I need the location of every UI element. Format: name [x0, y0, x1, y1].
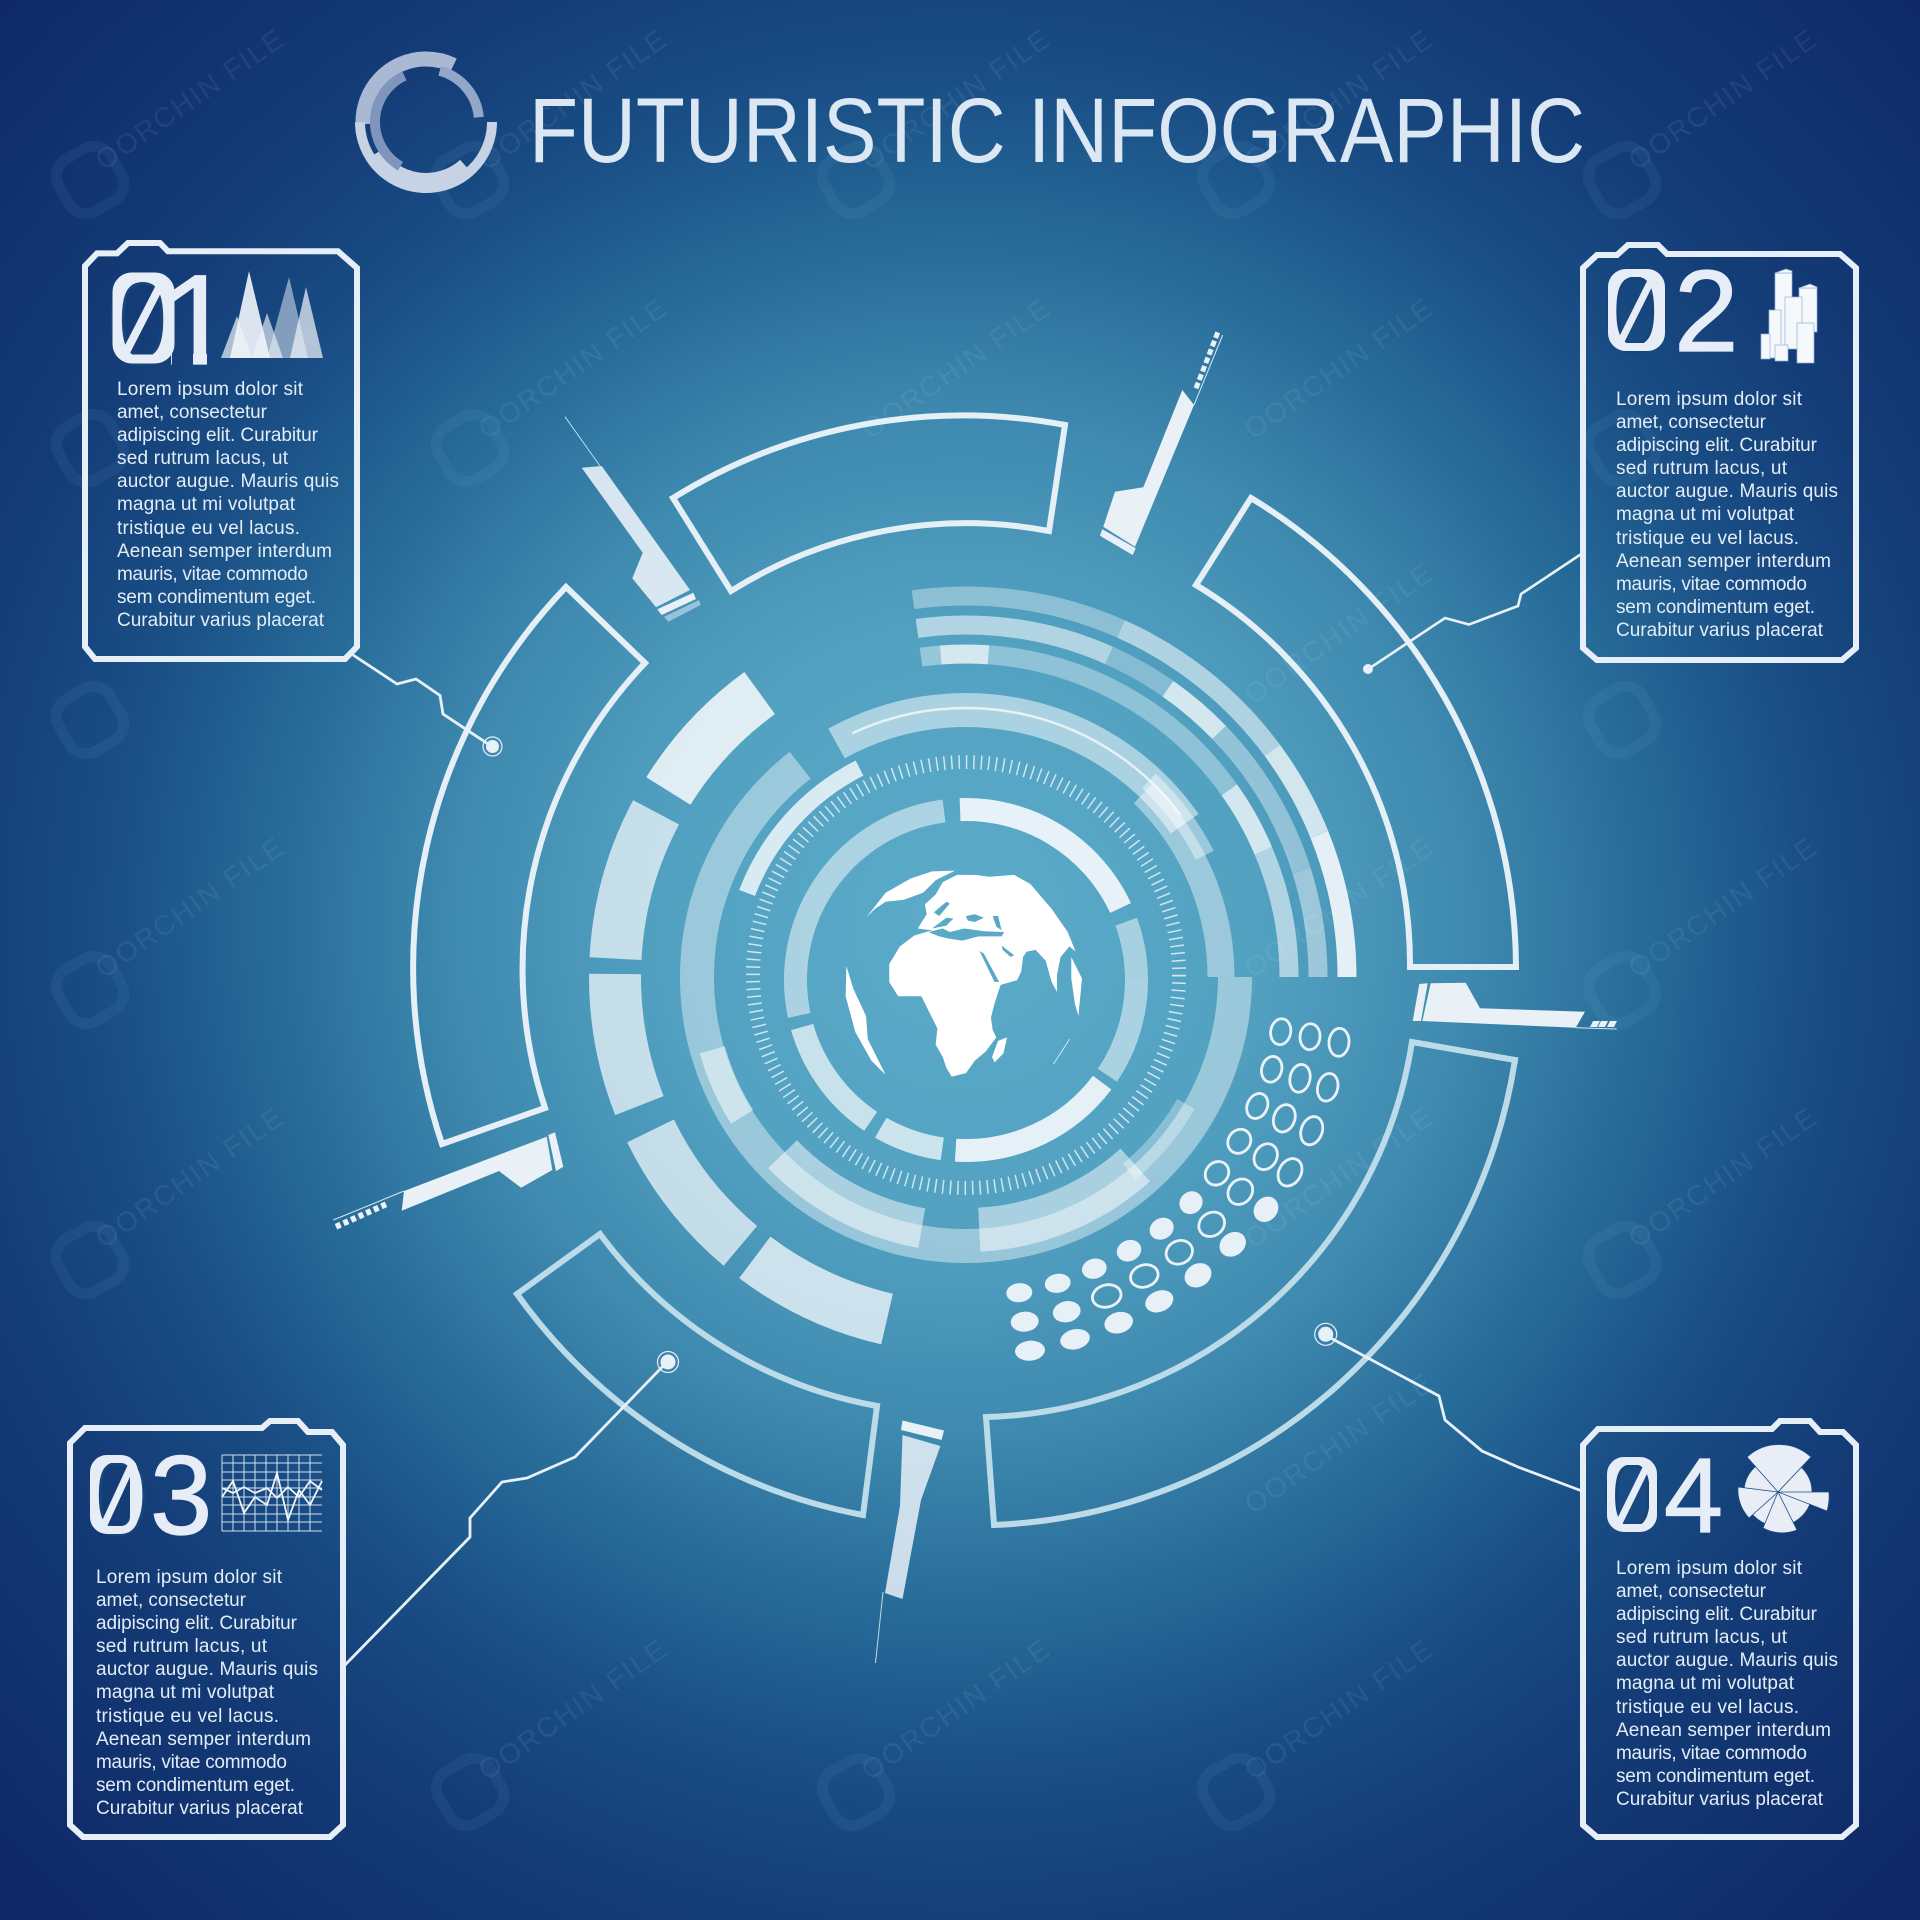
panel 04 text: Lorem ipsum dolor sit [1616, 1558, 1803, 1579]
watermark pattern: OORCHIN FILE [90, 1101, 290, 1254]
outlined dots [1090, 1017, 1350, 1310]
panel 04 text: sem condimentum eget. [1616, 1766, 1815, 1787]
panel 01 text [117, 379, 339, 631]
icon: polar pie chart [1738, 1444, 1829, 1533]
panel 04 frame [1583, 1421, 1856, 1837]
panel 03 text: adipiscing elit. Curabitur [96, 1613, 298, 1634]
panel 03 text: tristique eu vel lacus. [96, 1706, 279, 1727]
panel 03 text: Curabitur varius placerat [96, 1798, 304, 1819]
pointer top-left [565, 417, 701, 622]
watermark pattern: OORCHIN FILE [1239, 1367, 1439, 1520]
panel 04 text: amet, consectetur [1616, 1581, 1767, 1602]
panel 01 text: amet, consectetur [117, 402, 268, 423]
panel 04 text: tristique eu vel lacus. [1616, 1697, 1799, 1718]
number 03: 3 [150, 1433, 212, 1558]
dot matrix [1006, 1017, 1350, 1362]
number 02: 2 [1674, 246, 1739, 376]
globe [846, 871, 1082, 1077]
logo ring [340, 36, 512, 208]
number 03 [86, 1433, 212, 1558]
panel 02 text [1616, 389, 1838, 641]
panel 03 text: sem condimentum eget. [96, 1775, 295, 1796]
panel 04 text: Curabitur varius placerat [1616, 1789, 1824, 1810]
panel 03 text: mauris, vitae commodo [96, 1752, 287, 1773]
icon: mountains [221, 271, 323, 358]
panel 01 text: sed rutrum lacus, ut [117, 448, 289, 469]
leader line 04 [1315, 1323, 1582, 1491]
panel 03 text: Aenean semper interdum [96, 1729, 311, 1750]
watermark pattern: OORCHIN FILE [90, 831, 290, 984]
number 04 [1603, 1437, 1723, 1555]
panel 03 text [96, 1567, 318, 1819]
watermark pattern: OORCHIN FILE [856, 1633, 1056, 1786]
watermark pattern: OORCHIN FILE [90, 23, 290, 176]
panel 03 text: sed rutrum lacus, ut [96, 1636, 268, 1657]
watermark pattern: OORCHIN FILE [473, 23, 673, 176]
panel 02 text: mauris, vitae commodo [1616, 574, 1807, 595]
panel 04 text: magna ut mi volutpat [1616, 1673, 1795, 1694]
watermark pattern: OORCHIN FILE [1239, 23, 1439, 176]
number 02: 0 [1603, 246, 1668, 376]
panel 02 text: auctor augue. Mauris quis [1616, 481, 1838, 502]
watermark pattern: OORCHIN FILE [1239, 1633, 1439, 1786]
outer outlined segments [413, 415, 1516, 1525]
watermark pattern: OORCHIN FILE [1239, 557, 1439, 710]
number 01: 1 [162, 249, 233, 392]
panel 02 text: amet, consectetur [1616, 412, 1767, 433]
title: FUTURISTIC INFOGRAPHIC [529, 80, 1585, 182]
panel 03 text: magna ut mi volutpat [96, 1682, 275, 1703]
number 02 [1603, 246, 1739, 376]
panel 04 [1583, 1421, 1856, 1837]
panel 01 text: magna ut mi volutpat [117, 494, 296, 515]
watermark pattern: OORCHIN FILE [1239, 831, 1439, 984]
panel 04 text: auctor augue. Mauris quis [1616, 1650, 1838, 1671]
tick ring [753, 762, 1179, 1188]
panel 01 text: auctor augue. Mauris quis [117, 471, 339, 492]
watermark pattern: OORCHIN FILE [1623, 831, 1823, 984]
watermark pattern: OORCHIN FILE [856, 292, 1056, 445]
watermark pattern: OORCHIN FILE [473, 1633, 673, 1786]
panel 02 text: sed rutrum lacus, ut [1616, 458, 1788, 479]
panel 02 text: sem condimentum eget. [1616, 597, 1815, 618]
panel 01 text: tristique eu vel lacus. [117, 518, 300, 539]
panel 03 text: Lorem ipsum dolor sit [96, 1567, 283, 1588]
pointer right [1413, 983, 1617, 1029]
panel 01 text: Lorem ipsum dolor sit [117, 379, 304, 400]
panel 04 text: sed rutrum lacus, ut [1616, 1627, 1788, 1648]
panel 02 text: Lorem ipsum dolor sit [1616, 389, 1803, 410]
panel 02 text: Aenean semper interdum [1616, 551, 1831, 572]
panel 02 text: adipiscing elit. Curabitur [1616, 435, 1818, 456]
inner segmented ring [727, 741, 1205, 1219]
upper-right triple arc [433, 444, 1499, 1510]
panel 02 text: Curabitur varius placerat [1616, 620, 1824, 641]
panel 01 text: mauris, vitae commodo [117, 564, 308, 585]
watermark pattern: OORCHIN FILE [856, 23, 1056, 176]
filled dots [1006, 1187, 1283, 1362]
panel 02 [1583, 245, 1856, 660]
icon: buildings [1761, 269, 1817, 363]
panel 03 frame [70, 1421, 343, 1837]
panel 02 frame [1583, 245, 1856, 660]
watermark pattern: OORCHIN FILE [1239, 1101, 1439, 1254]
wide left band segments [471, 482, 1460, 1472]
watermark pattern: OORCHIN FILE [1239, 292, 1439, 445]
watermark pattern: OORCHIN FILE [473, 292, 673, 445]
number 01 [110, 272, 207, 365]
panel 01 frame [85, 243, 357, 659]
leader line 03 [345, 1352, 678, 1665]
panel 04 text: mauris, vitae commodo [1616, 1743, 1807, 1764]
watermark pattern: OORCHIN FILE [1623, 23, 1823, 176]
middle translucent rings [587, 598, 1345, 1356]
pointer top-right [1100, 330, 1223, 555]
panel 03 [70, 1421, 343, 1837]
leader line 01 [353, 655, 502, 756]
panel 04 text: Aenean semper interdum [1616, 1720, 1831, 1741]
panel 04 text [1616, 1558, 1838, 1810]
pointer lower-left [333, 1132, 563, 1227]
number 04: 4 [1664, 1437, 1723, 1555]
panel 01 text: Aenean semper interdum [117, 541, 332, 562]
panel 01 text: sem condimentum eget. [117, 587, 316, 608]
watermark pattern: OORCHIN FILE [1623, 1101, 1823, 1254]
panel 04 text: adipiscing elit. Curabitur [1616, 1604, 1818, 1625]
panel 01 text: adipiscing elit. Curabitur [117, 425, 319, 446]
icon: line chart [222, 1455, 322, 1531]
number 01: 0 [107, 249, 178, 392]
panel 03 text: auctor augue. Mauris quis [96, 1659, 318, 1680]
pointer bottom [876, 1420, 944, 1663]
panel 01 [85, 243, 357, 659]
number 04: 0 [1603, 1437, 1662, 1555]
panel 03 text: amet, consectetur [96, 1590, 247, 1611]
panel 02 text: tristique eu vel lacus. [1616, 528, 1799, 549]
panel 01 text: Curabitur varius placerat [117, 610, 325, 631]
panel 02 text: magna ut mi volutpat [1616, 504, 1795, 525]
leader line 02 [1363, 554, 1582, 674]
number 03: 0 [86, 1433, 148, 1558]
